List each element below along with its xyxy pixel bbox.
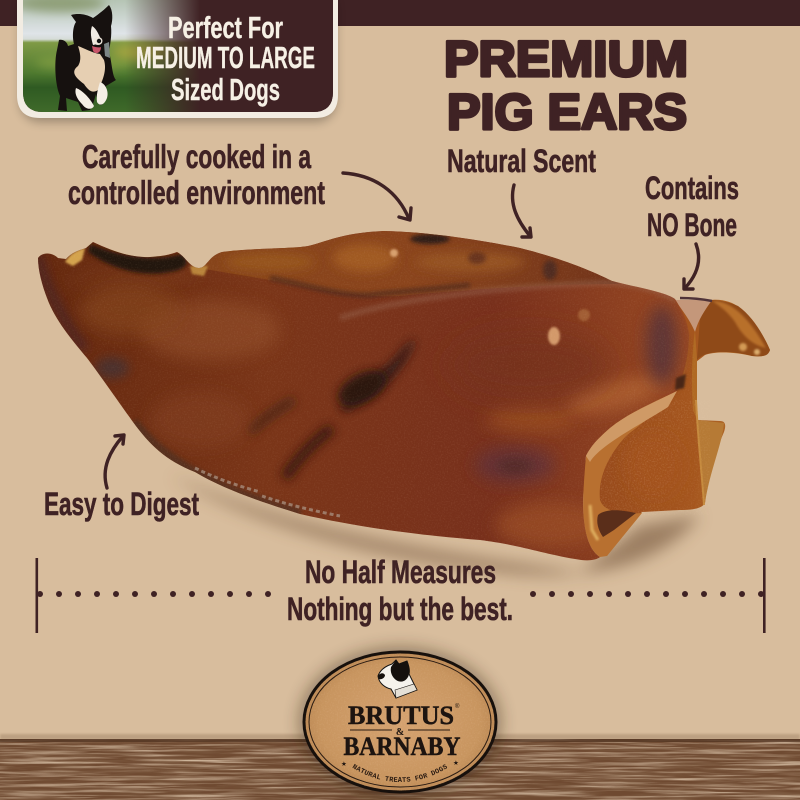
logo wordmark: & — [396, 727, 404, 738]
measure line: left — [36, 558, 271, 633]
tagline — [287, 554, 513, 627]
logo wordmark — [344, 701, 461, 761]
title — [444, 31, 688, 140]
ear tube flap and orange inner — [580, 298, 770, 556]
wood floor band — [0, 734, 800, 800]
arrow: natural scent — [512, 185, 531, 237]
logo: Brutus and Barnaby — [290, 638, 510, 800]
dog chest and legs — [74, 46, 105, 92]
logo stars — [341, 759, 459, 768]
ear opening — [583, 374, 686, 557]
product: pig ear — [30, 230, 770, 575]
title: PREMIUM — [444, 31, 688, 87]
dog face — [91, 26, 102, 45]
badge text: Perfect For — [168, 10, 283, 45]
logo stars: ★ — [453, 759, 459, 767]
ear shading — [30, 230, 700, 565]
callout: easy to digest: Easy to Digest — [44, 486, 199, 522]
callout: carefully cooked: controlled environment — [68, 174, 325, 211]
logo wordmark: BARNABY — [344, 732, 461, 761]
callout: contains no bone — [645, 170, 739, 243]
badge text: Sized Dogs — [171, 72, 280, 107]
ear shadow — [170, 475, 700, 575]
arrow: easy to digest — [105, 435, 124, 488]
dog body — [55, 5, 116, 111]
callout: carefully cooked — [68, 138, 325, 211]
callout: contains no bone: Contains — [645, 170, 739, 206]
logo tagline: NATURAL TREATS FOR DOGS — [352, 764, 448, 782]
icon: bulldog head — [378, 660, 417, 698]
arrow: carefully cooked — [343, 173, 411, 220]
callout: natural scent: Natural Scent — [447, 143, 596, 179]
top banner bar — [0, 0, 800, 26]
dog photo — [15, 0, 333, 112]
title: PIG EARS — [447, 84, 687, 140]
callout: carefully cooked: Carefully cooked in a — [82, 138, 311, 175]
measure line: right — [530, 558, 766, 633]
panel: dog size badge — [15, 0, 338, 122]
ear main body — [38, 231, 689, 560]
logo wordmark: BRUTUS — [348, 701, 454, 730]
arrow: contains no bone — [684, 244, 699, 289]
tagline: Nothing but the best. — [287, 591, 513, 627]
logo stars: ★ — [341, 760, 347, 768]
badge text — [136, 10, 315, 107]
badge text: MEDIUM TO LARGE — [136, 40, 315, 75]
callout: contains no bone: NO Bone — [647, 207, 737, 243]
logo wordmark: ® — [455, 703, 460, 710]
tagline: No Half Measures — [305, 554, 496, 590]
